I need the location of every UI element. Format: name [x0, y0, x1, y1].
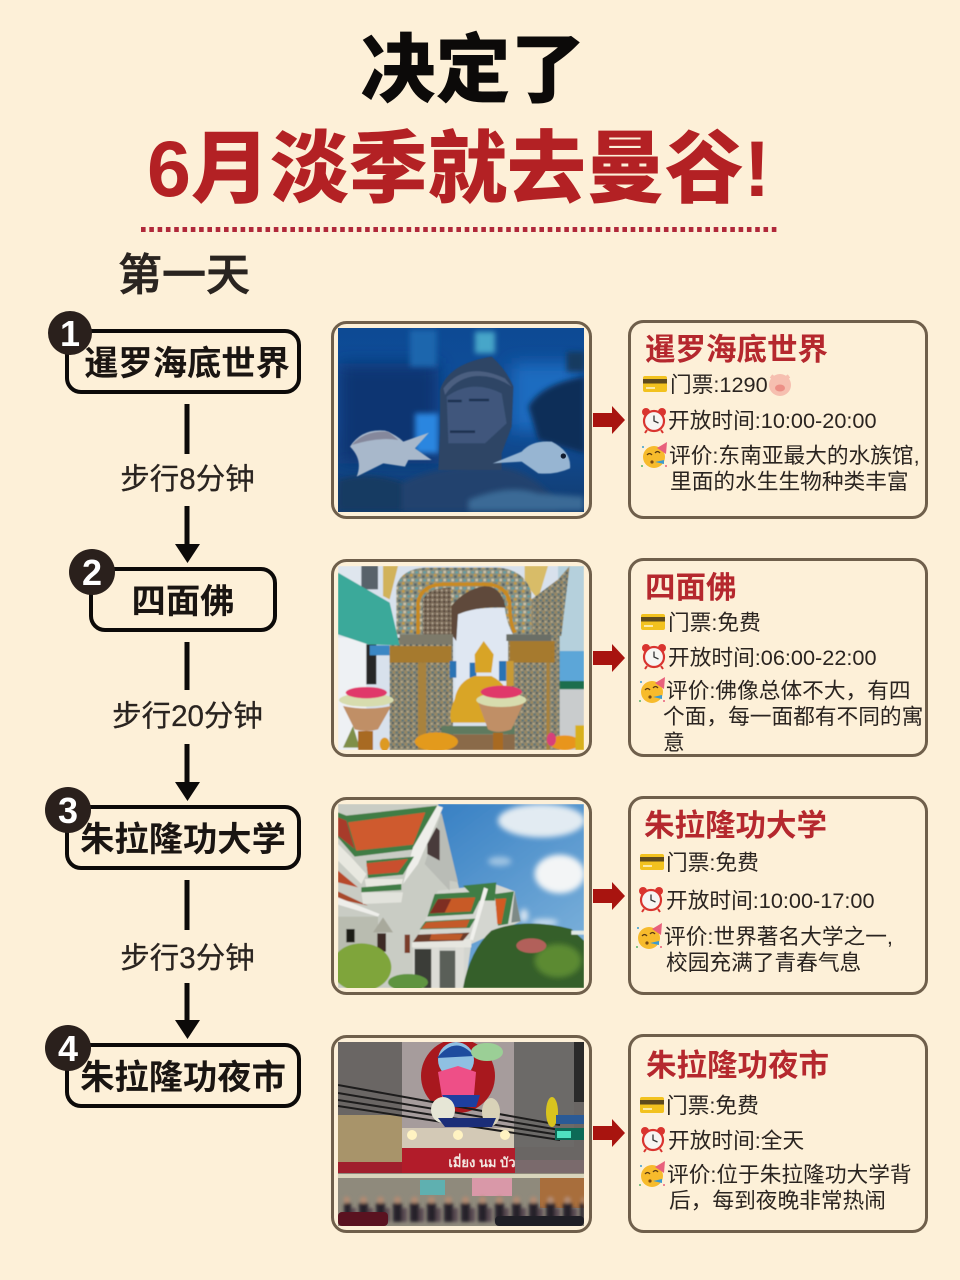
step 3 badge: 3 [58, 790, 78, 831]
card 2 review: 个面，每一面都有不同的寓 [663, 704, 923, 729]
card 4 hours: 开放时间:全天 [668, 1128, 804, 1153]
step 4 badge: 4 [58, 1028, 78, 1069]
card 3 review: 评价:世界著名大学之一, [664, 924, 893, 949]
card 2 review: 意 [663, 730, 685, 755]
day heading: 第一天 [118, 251, 250, 300]
step 4 box: 朱拉隆功夜市 [80, 1059, 286, 1097]
walk connector 2 [112, 642, 263, 801]
walk connector 3: 步行3分钟 [120, 942, 255, 975]
step 1 box: 暹罗海底世界 [84, 345, 290, 383]
step 1 badge: 1 [60, 313, 80, 354]
info card 1 [630, 322, 926, 518]
card 1 ticket [643, 372, 791, 397]
card 1 review: 里面的水生生物种类丰富 [670, 469, 909, 494]
step 1 box [67, 331, 299, 392]
photo panel: night market: เมี่ยง นม บัว [448, 1153, 516, 1170]
card 3 hours: 开放时间:10:00-17:00 [666, 888, 875, 913]
step 2 box: 四面佛 [132, 583, 234, 621]
step 3 badge [45, 787, 91, 833]
step 2 box [91, 569, 275, 630]
step 4 badge [45, 1025, 91, 1071]
card 2 review [639, 677, 923, 755]
card 1 title: 暹罗海底世界 [645, 333, 828, 367]
card 4 review [639, 1161, 912, 1213]
route flow: left column [45, 311, 299, 1106]
step 3 box: 朱拉隆功大学 [80, 821, 286, 859]
card 2 review: 评价:佛像总体不大，有四 [666, 678, 911, 703]
card 4 review: 评价:位于朱拉隆功大学背 [667, 1162, 912, 1187]
step 3 box [67, 807, 299, 868]
title: black line: 决定了 [360, 28, 586, 112]
arrow 2 [593, 644, 625, 672]
arrow 1 [593, 406, 625, 434]
arrow 3 [593, 882, 625, 910]
card 2 ticket: 门票:免费 [668, 610, 761, 635]
info card 2 [630, 560, 926, 756]
card 2 hours: 开放时间:06:00-22:00 [668, 645, 877, 670]
step 2 badge: 2 [82, 552, 102, 593]
card 3 ticket: 门票:免费 [666, 850, 759, 875]
walk connector 1 [120, 404, 255, 563]
walk connector 1: 步行8分钟 [120, 463, 255, 496]
card 3 review: 校园充满了青春气息 [666, 950, 861, 975]
card 2 title: 四面佛 [645, 571, 736, 605]
photo panel: university [331, 798, 590, 994]
card 1 review: 评价:东南亚最大的水族馆, [669, 443, 920, 468]
arrow 4 [593, 1119, 625, 1147]
photo panel: Erawan shrine [332, 560, 590, 756]
photo panel: night market [332, 1036, 590, 1232]
info card 3 [630, 798, 926, 994]
card 3 title: 朱拉隆功大学 [644, 809, 827, 843]
title: red line: 6月淡季就去曼谷! [147, 124, 770, 213]
info card 4 [630, 1036, 926, 1232]
card 4 review: 后，每到夜晚非常热闹 [669, 1188, 886, 1213]
card 1 hours: 开放时间:10:00-20:00 [668, 408, 877, 433]
step 2 badge [69, 549, 115, 595]
card 1 ticket: 门票:1290 [670, 372, 768, 397]
card 1 review [641, 442, 920, 494]
card 4 title: 朱拉隆功夜市 [646, 1049, 829, 1083]
card 4 ticket: 门票:免费 [666, 1093, 759, 1118]
step 4 box [67, 1045, 299, 1106]
walk connector 2: 步行20分钟 [112, 700, 263, 733]
walk connector 3 [120, 880, 255, 1039]
photo panel: aquarium [332, 322, 590, 518]
step 1 badge [48, 311, 92, 355]
card 3 review [636, 923, 893, 975]
